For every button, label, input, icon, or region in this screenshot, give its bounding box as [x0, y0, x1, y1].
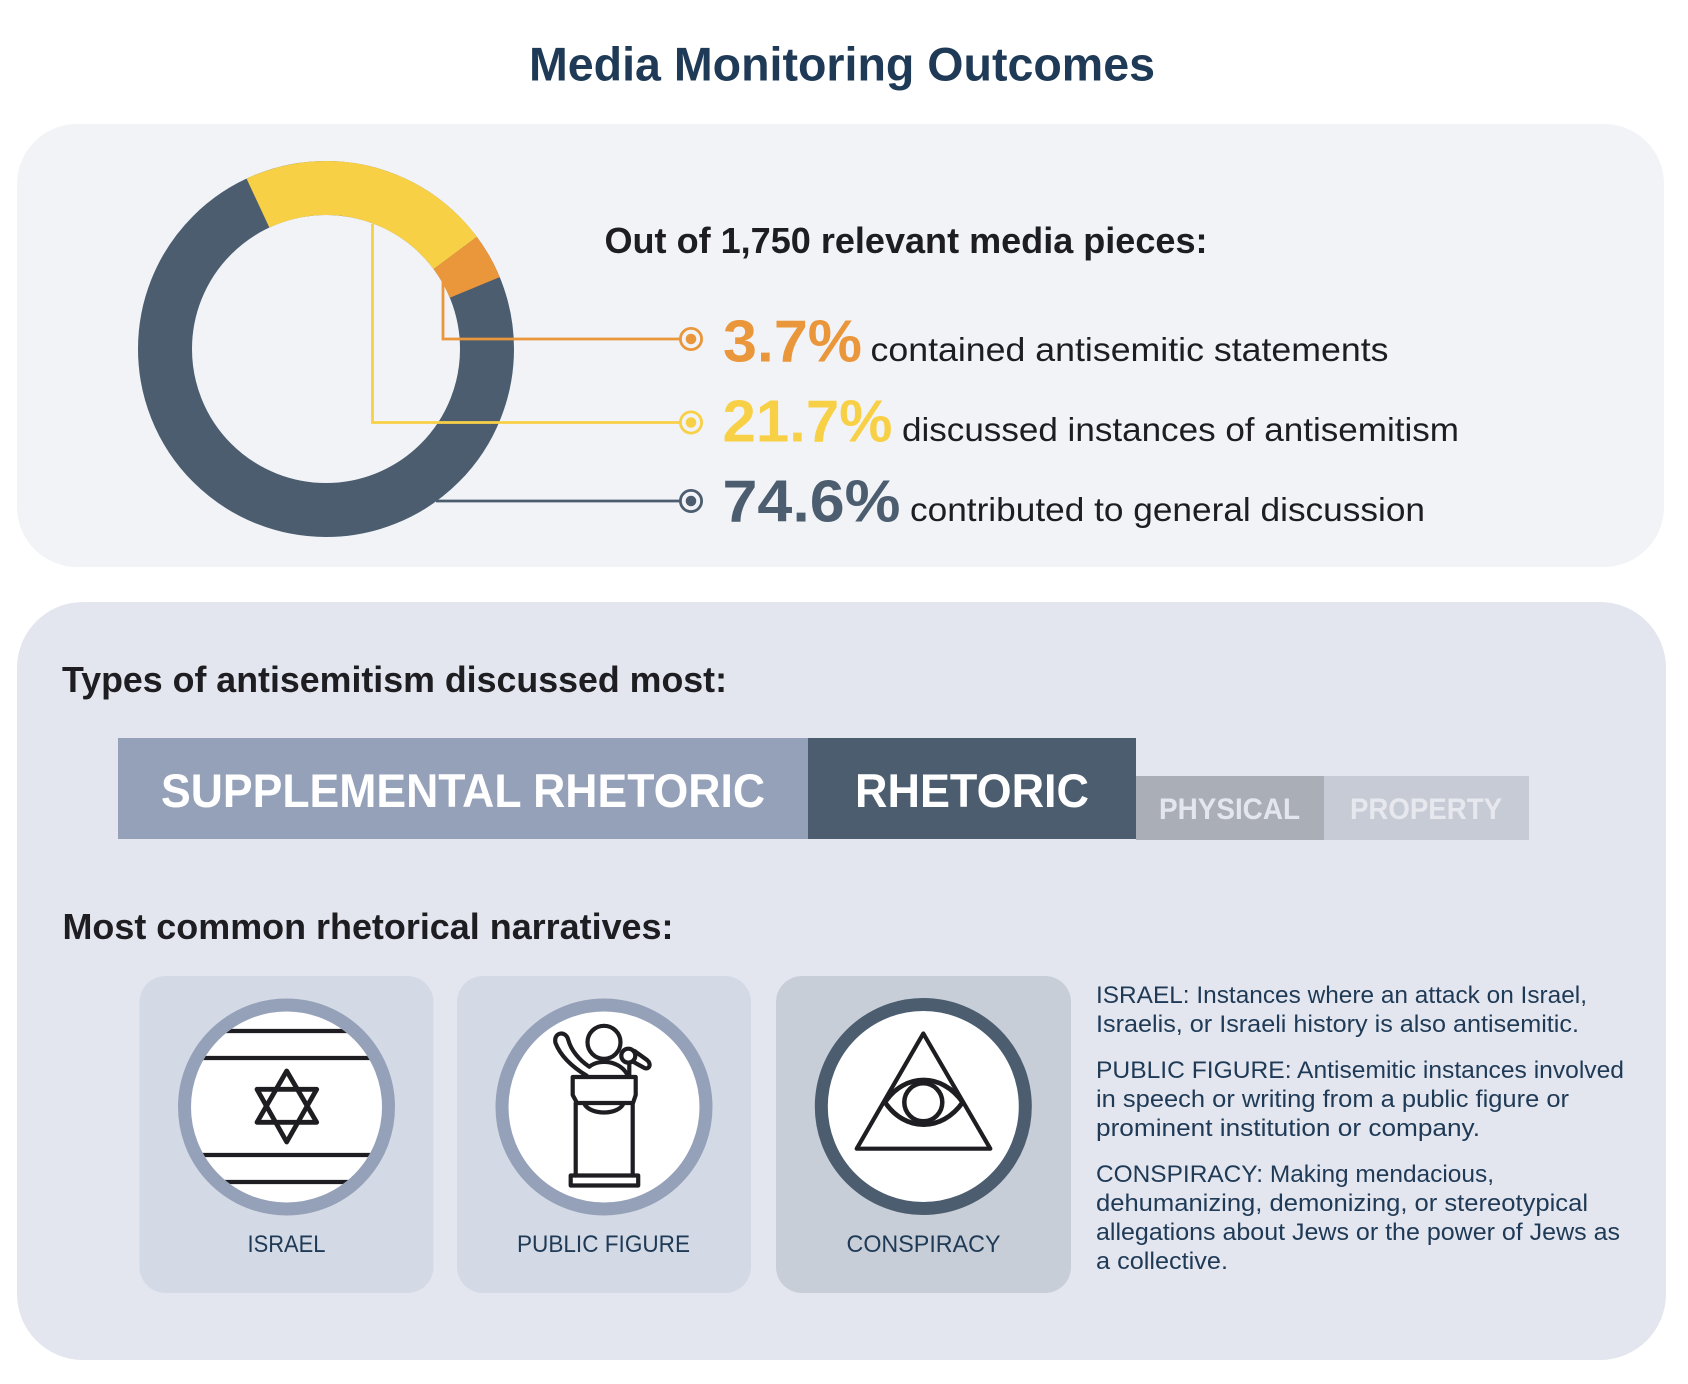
stat: 74.6%: contributed to general discussion: [910, 491, 1425, 528]
definition: Israel: Israelis, or Israeli history is also antisemitic.: [1096, 1011, 1579, 1038]
stat: 74.6%: 74.6%: [722, 468, 900, 534]
stat: 21.7%: 21.7%: [722, 388, 892, 454]
definition: public figure: prominent institution or company.: [1096, 1115, 1480, 1142]
title: Media Monitoring Outcomes: [529, 38, 1155, 90]
leader line: 21.7%: [372, 224, 702, 433]
heading: rhetorical narratives: Most common rhetorical narratives:: [62, 906, 674, 947]
definition: public figure: in speech or writing from a public figure or: [1096, 1086, 1569, 1113]
stat: 3.7%: 3.7%: [723, 308, 862, 374]
bar: physical: PHYSICAL: [1159, 793, 1300, 826]
definition: public figure: [1096, 1057, 1624, 1142]
panel: types and narratives: [17, 602, 1666, 1360]
bar: property: [1324, 776, 1529, 840]
stat: 21.7%: discussed instances of antisemitism: [902, 411, 1459, 448]
label: Israel: ISRAEL: [248, 1231, 326, 1258]
leader line: 74.6%: [436, 490, 702, 512]
label: public figure: PUBLIC FIGURE: [517, 1231, 690, 1258]
definition: conspiracy: allegations about Jews or the power of Jews as: [1096, 1219, 1620, 1246]
icon: Israeli flag: [202, 1028, 370, 1184]
bar: supplemental rhetoric: SUPPLEMENTAL RHETORIC: [161, 764, 765, 817]
definition: conspiracy: [1096, 1161, 1620, 1275]
stat: 3.7%: [723, 308, 1388, 374]
definition: conspiracy: dehumanizing, demonizing, or stereotypical: [1096, 1190, 1588, 1217]
donut chart: [165, 161, 500, 510]
stat: 3.7%: contained antisemitic statements: [870, 331, 1388, 368]
bar: property: PROPERTY: [1350, 793, 1502, 826]
leader line: 3.7%: [443, 281, 702, 350]
stat: 21.7%: [722, 388, 1459, 454]
bar chart: types: [118, 738, 1529, 840]
label: conspiracy: CONSPIRACY: [846, 1231, 1000, 1258]
card: Israel: [140, 976, 434, 1293]
stat: 74.6%: [722, 468, 1425, 534]
icon: eye in triangle: [857, 1034, 990, 1149]
bar: physical: [1136, 776, 1324, 840]
bar: rhetoric: [808, 738, 1136, 839]
definition: public figure: PUBLIC FIGURE: Antisemitic instances involved: [1096, 1057, 1624, 1084]
bar: rhetoric: RHETORIC: [855, 764, 1089, 817]
definition: conspiracy: a collective.: [1096, 1248, 1228, 1275]
definition: Israel: [1096, 982, 1587, 1038]
panel: media pieces overview: [17, 124, 1664, 567]
definition: conspiracy: CONSPIRACY: Making mendacious,: [1096, 1161, 1494, 1188]
bar: supplemental rhetoric: [118, 738, 808, 839]
definition: Israel: ISRAEL: Instances where an attack on Israel,: [1096, 982, 1587, 1009]
card: public figure: [457, 976, 751, 1293]
icon: speaker at podium: [555, 1026, 650, 1186]
heading: types of antisemitism: Types of antisemitism discussed most:: [62, 659, 727, 700]
heading: out of 1,750: Out of 1,750 relevant media pieces:: [604, 220, 1208, 261]
card: conspiracy: [776, 976, 1071, 1293]
